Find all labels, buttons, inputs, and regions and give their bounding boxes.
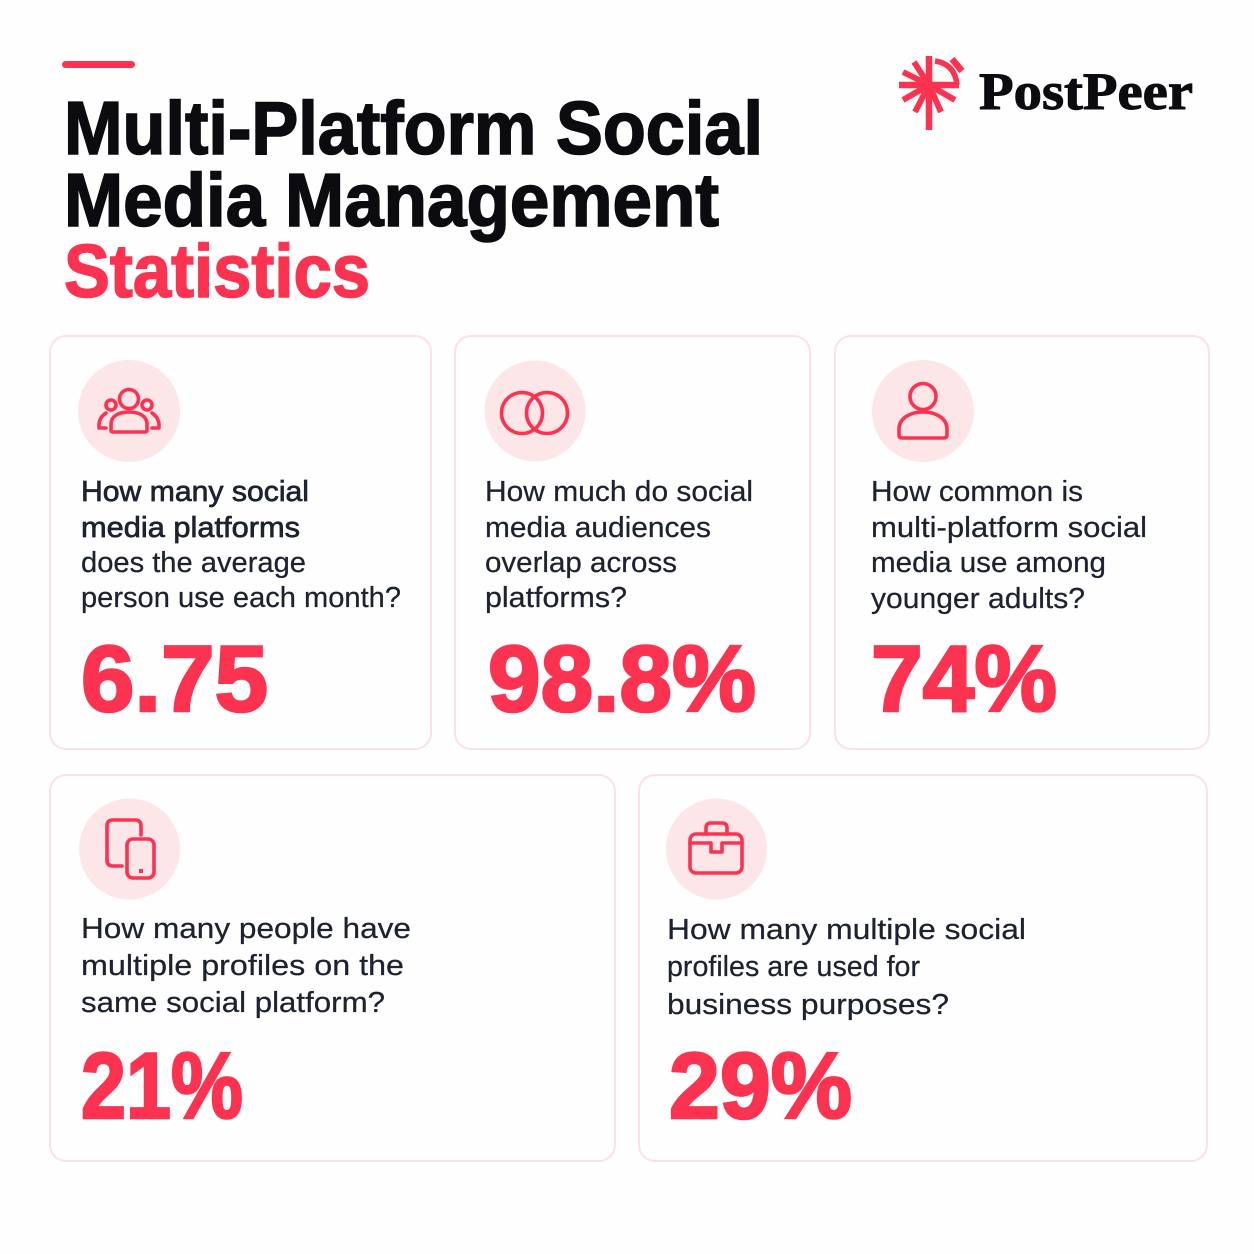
accent bar (62, 61, 135, 68)
icon: logo burst (899, 56, 962, 130)
question text: multiple profiles on the (81, 950, 404, 982)
title: Statistics (64, 229, 370, 313)
question text (81, 913, 411, 1019)
icon: briefcase (666, 798, 767, 900)
logo wordmark: PostPeer (979, 63, 1193, 121)
question text: media audiences (485, 512, 711, 544)
statistic: 6.75 (81, 626, 268, 731)
question text: person use each month? (81, 582, 401, 614)
question text: How many multiple social (667, 914, 1026, 946)
title: Media Management (64, 158, 719, 242)
question text: How many social (81, 476, 309, 508)
question text: platforms? (485, 582, 627, 614)
title (64, 86, 763, 313)
icon: devices (79, 798, 180, 900)
question text: media platforms (81, 512, 300, 544)
panel: audience overlap (455, 336, 810, 749)
question text (81, 476, 401, 614)
question text (667, 914, 1026, 1021)
question text: profiles are used for (667, 951, 920, 983)
statistic: 74% (871, 626, 1057, 731)
question text: How common is (871, 476, 1083, 508)
statistic: 98.8% (488, 626, 756, 731)
question text (485, 476, 753, 614)
question text: overlap across (485, 547, 677, 579)
logo: PostPeer (899, 56, 1193, 130)
question text: same social platform? (81, 987, 385, 1019)
panel: multiple profiles (50, 775, 615, 1161)
question text: does the average (81, 547, 306, 579)
title: Multi-Platform Social (64, 86, 763, 170)
question text (871, 476, 1147, 615)
question text: younger adults? (871, 583, 1085, 615)
panel: average platforms (50, 336, 431, 749)
question text: business purposes? (667, 989, 949, 1021)
question text: How much do social (485, 476, 753, 508)
statistic: 29% (669, 1033, 852, 1138)
panel: business profiles (639, 775, 1207, 1161)
icon: overlapping circles (484, 360, 586, 462)
question text: multi-platform social (871, 512, 1147, 544)
statistic: 21% (81, 1033, 243, 1138)
panel: younger adults (835, 336, 1209, 749)
icon: group of people (78, 360, 180, 462)
icon: person (872, 360, 974, 462)
question text: media use among (871, 547, 1106, 579)
question text: How many people have (81, 913, 411, 945)
